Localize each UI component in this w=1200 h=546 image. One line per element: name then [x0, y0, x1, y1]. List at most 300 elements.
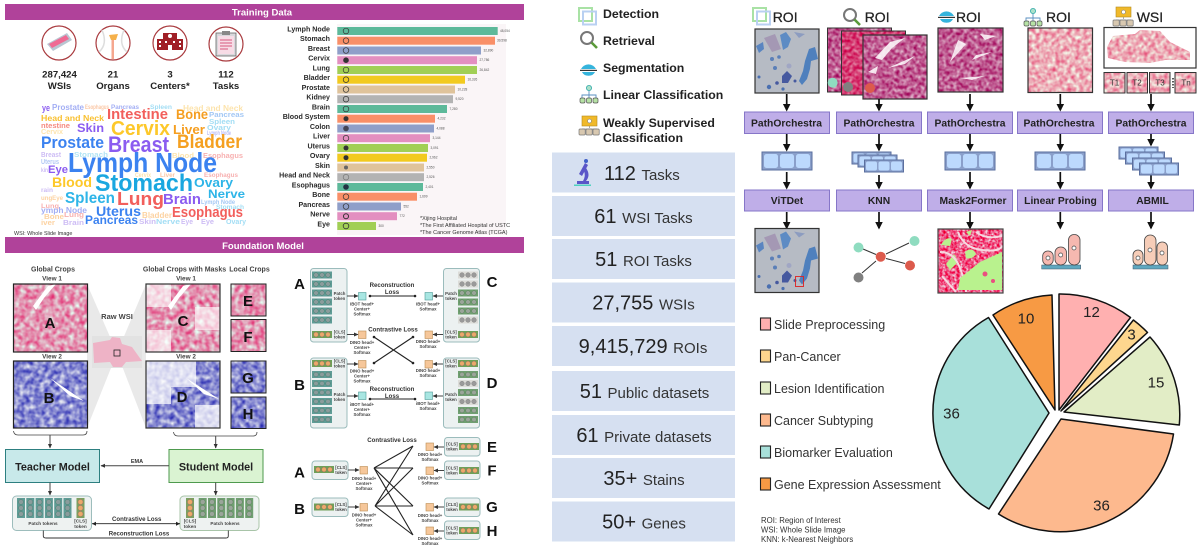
input: tiles T1 to Tn: T3	[1155, 78, 1165, 88]
stat: 51 public datasets: 51 Public datasets	[580, 381, 709, 403]
word cloud: Cervix	[41, 129, 63, 136]
head squares and heads labels: iBOT head+	[416, 401, 440, 406]
local head labels: DINO head+	[352, 512, 377, 518]
word cloud: Eye	[201, 219, 214, 226]
stat: 61 WSI tasks	[552, 196, 735, 236]
word cloud: Liver	[160, 173, 176, 179]
bar: nerve: 772	[400, 214, 405, 218]
local diagram letters: B	[294, 501, 305, 518]
bar: liver: Liver	[313, 133, 330, 141]
word cloud: Esophagus	[203, 153, 243, 160]
bar: lung	[313, 64, 489, 74]
local head labels	[352, 452, 443, 546]
student token panel: [CLS]	[184, 518, 197, 524]
bar: stomach: 39,598	[497, 39, 507, 43]
bar: blood system	[283, 113, 446, 123]
token stack C: Patch	[445, 291, 457, 296]
word cloud: Esophagus	[204, 173, 239, 179]
word cloud: Prostate	[52, 103, 85, 112]
word cloud: Bladder	[142, 211, 172, 220]
contrastive links to local crops	[348, 437, 444, 535]
bar: blood system: Blood System	[283, 113, 330, 121]
word cloud: Pancreas	[209, 112, 244, 119]
footnotes: data centers: *The First Affiliated Hospital of USTC	[420, 223, 510, 229]
input image: linear classification	[1028, 28, 1092, 92]
word cloud: Esophagus	[172, 204, 243, 221]
bar: colon: 4,088	[436, 126, 445, 130]
head squares and heads labels: Softmax	[354, 412, 371, 417]
crop labels: View 2	[176, 354, 196, 360]
abbreviations note: ROI: Region of Interest	[761, 516, 842, 525]
stat: 51 public datasets	[552, 371, 735, 411]
head squares and heads labels: Softmax	[420, 373, 437, 378]
output: nearest neighbor graph	[854, 236, 920, 282]
local CLS panels E to H: [CLS]	[446, 526, 458, 530]
word cloud: Prostate	[41, 133, 104, 152]
word cloud: Esophagus	[85, 105, 109, 111]
local crop F: F	[243, 329, 253, 346]
stat: organs: Organs	[96, 81, 130, 92]
stat: centers: Centers*	[150, 81, 190, 92]
bar: colon	[310, 123, 445, 132]
header: weakly supervised WSI	[1113, 7, 1163, 26]
local head labels: Center+	[356, 481, 373, 486]
word cloud: Spleen	[209, 119, 235, 126]
bar: kidney: 9,520	[456, 97, 464, 101]
global CLS panels A and B: token	[335, 507, 347, 512]
bar: uterus: Uterus	[308, 142, 330, 150]
bar: brain: Brain	[312, 104, 330, 112]
bar: skin: 2,550	[426, 166, 435, 170]
word cloud: Intestine	[107, 106, 168, 123]
token stack D: token	[445, 364, 457, 368]
input image: detection	[755, 29, 819, 93]
box: KNN	[836, 190, 922, 211]
token stack B: token	[334, 397, 346, 402]
bar: esophagus	[292, 182, 434, 191]
raw WSI with zoom cones	[87, 284, 146, 428]
reconstruction and contrastive links: Reconstruction	[370, 282, 415, 289]
stat: 51 ROI tasks: 51 ROI Tasks	[595, 249, 692, 271]
head squares and heads labels: DINO head+	[350, 340, 375, 345]
abbreviations note: KNN: k-Nearest Neighbors	[761, 535, 853, 544]
local CLS panels E to H: [CLS]	[446, 442, 458, 446]
bar: prostate: 10,228	[458, 88, 467, 92]
reconstruction and contrastive links: Loss	[385, 289, 400, 296]
reconstruction and contrastive links: Contrastive Loss	[368, 326, 418, 334]
word cloud: Stomach	[95, 170, 193, 197]
image crop B	[14, 361, 88, 428]
local CLS panels E to H	[444, 438, 480, 540]
box: PathOrchestra	[928, 112, 1012, 134]
header: detection ROI: ROI	[773, 9, 798, 25]
token stack D	[444, 358, 480, 428]
label: detection: Detection	[603, 7, 659, 21]
local head labels: Softmax	[422, 518, 439, 523]
input: tiles T1 to Tn: T2	[1132, 78, 1142, 88]
token stack C: token	[445, 296, 457, 301]
local head labels: Softmax	[356, 486, 373, 491]
word cloud: Skin	[139, 219, 156, 226]
box: PathOrchestra: PathOrchestra	[1116, 118, 1187, 130]
local crop F	[231, 320, 266, 352]
head squares and heads labels: Center+	[354, 345, 371, 350]
word cloud: Ovary	[207, 125, 231, 132]
student to tokens arrow	[215, 482, 217, 495]
label: weakly supervised classification: Classification	[603, 131, 683, 145]
local diagram letters: E	[487, 439, 497, 456]
token stack B	[310, 358, 347, 428]
bar: kidney: Kidney	[306, 94, 330, 102]
word cloud: Stomach	[216, 205, 244, 211]
box: ViTDet: ViTDet	[771, 196, 804, 207]
EMA arrow	[101, 459, 169, 466]
word cloud: Bone	[44, 214, 64, 221]
stack letters: A	[294, 276, 305, 293]
stat: 61 WSI tasks: 61 WSI Tasks	[594, 206, 693, 228]
head squares and heads labels: Center+	[354, 374, 371, 378]
bar: bone: Bone	[312, 191, 330, 199]
word cloud: Brain	[63, 220, 84, 227]
pie legend	[760, 318, 941, 492]
teacher model box	[6, 450, 100, 482]
token stack B: Patch	[334, 392, 346, 397]
word cloud: Brain	[163, 191, 201, 208]
bar: cervix: 27,786	[480, 58, 489, 62]
local CLS panels E to H: token	[446, 530, 458, 536]
bar: uterus: 3,091	[430, 146, 439, 150]
word cloud: Lymph Node	[207, 131, 231, 137]
slice: biomarker evaluation, 36	[933, 318, 1049, 509]
stat: 61 private datasets	[552, 415, 735, 455]
bar: nerve: Nerve	[310, 211, 330, 219]
bar: esophagus: 2,401	[426, 185, 434, 189]
word cloud: Lung	[117, 189, 164, 209]
local crop E: E	[243, 293, 253, 310]
stat: 35+ stains: 35+ Stains	[603, 468, 685, 490]
stat: 50+ genes	[552, 502, 735, 542]
bar: prostate	[302, 84, 467, 94]
bar: head and neck: 2,526	[426, 175, 435, 179]
box: PathOrchestra	[744, 112, 830, 134]
image crop A: A	[45, 315, 56, 332]
header: retrieval ROI: ROI	[865, 9, 890, 25]
slice: lesion identification, 15: 15	[1148, 374, 1164, 392]
stat: tasks: Tasks	[213, 81, 239, 92]
slice: cancer subtyping, 36: 36	[1093, 498, 1110, 514]
word cloud: Spleen	[65, 190, 115, 207]
local crop G: G	[242, 370, 254, 387]
word cloud: Head and Neck	[183, 104, 244, 113]
header: segmentation ROI	[938, 9, 981, 25]
slice: cancer subtyping, 36	[998, 419, 1174, 532]
local crop G	[231, 361, 266, 393]
teacher token panel: Patch tokens	[28, 521, 58, 526]
note: WSI abbreviation: WSI: Whole Slide Image	[14, 231, 72, 237]
word cloud: Lymph Node	[68, 147, 217, 178]
token stack A: Patch	[334, 291, 346, 296]
word cloud: Pancreas	[111, 105, 140, 111]
bar: breast: 32,890	[484, 48, 493, 52]
word cloud: Skin	[77, 121, 104, 135]
heading: training data	[5, 4, 524, 20]
stat: 50+ genes: 50+ Genes	[602, 512, 686, 534]
arrows: weakly supervised flow	[1150, 94, 1152, 228]
slice: gene expression assessment, 10: 10	[1018, 310, 1034, 328]
token stack B: token	[334, 364, 346, 368]
bar: breast	[308, 45, 493, 54]
local CLS panels E to H: [CLS]	[446, 502, 458, 507]
local crop H: H	[243, 406, 253, 423]
bar: liver: 3,144	[432, 136, 441, 140]
input: whole slide image	[1104, 28, 1196, 68]
stats column	[552, 152, 735, 542]
word cloud: ye	[42, 103, 50, 113]
label: segmentation: Segmentation	[603, 61, 684, 75]
local crop loss diagram	[294, 437, 498, 546]
token stack D: token	[445, 397, 457, 402]
word cloud: ungEye	[41, 196, 64, 202]
local diagram letters: F	[487, 462, 497, 480]
student token panel: token	[184, 524, 196, 529]
input: tiles T1 to Tn	[1104, 72, 1196, 93]
label: retrieval: Retrieval	[603, 34, 655, 48]
local head labels: Center+	[356, 518, 373, 522]
image crop A	[14, 284, 88, 352]
student token panel	[180, 496, 259, 530]
arrows: detection flow	[786, 94, 788, 228]
token stack A: [CLS]	[334, 330, 346, 334]
word cloud: Pancreas	[85, 213, 138, 227]
heading: foundation model	[5, 237, 524, 253]
local head labels: DINO head+	[352, 476, 377, 481]
local head labels: Softmax	[422, 541, 439, 546]
pie chart: task categories	[933, 294, 1180, 532]
icon: weakly supervised classification	[579, 116, 599, 135]
word cloud: Breast	[41, 152, 62, 159]
raw WSI with zoom cones: Raw WSI	[101, 312, 133, 321]
footnotes: data centers: *The Cancer Genome Atlas (TCGA)	[420, 230, 508, 236]
stack letters: D	[487, 375, 498, 392]
head squares and heads labels: Softmax	[420, 306, 437, 312]
stat: WSIs: 287,424	[42, 70, 77, 80]
teacher token panel	[12, 496, 92, 530]
teacher token panel: token	[74, 524, 87, 529]
bar: nerve	[310, 211, 405, 220]
slice: slide preprocessing, 12: 12	[1083, 304, 1100, 321]
bar: pancreas	[298, 201, 409, 210]
local crop E	[231, 284, 266, 316]
stack letters	[294, 274, 498, 394]
bar: skin: Skin	[315, 162, 330, 170]
legend: gene expression assessment: Gene Expression Assessment	[774, 478, 941, 492]
word cloud: Head and Neck	[41, 113, 104, 123]
word cloud: Lymph Node	[201, 200, 236, 206]
EMA arrow: EMA	[131, 459, 143, 465]
bar: eye: Eye	[317, 220, 330, 228]
head squares and heads labels: Softmax	[420, 344, 437, 349]
box: PathOrchestra: PathOrchestra	[844, 118, 915, 130]
bar: stomach: Stomach	[300, 35, 330, 43]
arrows: linear flow	[1059, 94, 1061, 228]
box: PathOrchestra	[836, 112, 922, 134]
bracket and arrow to teacher	[14, 431, 87, 448]
label: linear classification: Linear Classification	[603, 88, 723, 102]
local head labels: DINO head+	[418, 452, 443, 457]
local head labels: Softmax	[356, 522, 373, 528]
local head labels: Softmax	[422, 480, 439, 486]
local head labels: DINO head+	[418, 476, 443, 480]
stat: WSIs	[42, 26, 77, 92]
output icon: classifier bars	[1042, 234, 1081, 269]
reconstruction and contrastive links: Reconstruction	[370, 386, 415, 393]
bar: breast: Breast	[308, 45, 331, 53]
header: retrieval ROI	[844, 9, 890, 25]
icon: linear classification	[580, 85, 598, 103]
bar: lung: 26,842	[480, 68, 489, 72]
bar: ovary: 2,962	[430, 156, 438, 160]
box: PathOrchestra: PathOrchestra	[1024, 118, 1095, 130]
stat: 9,415,729 ROIs: 9,415,729 ROIs	[579, 336, 707, 358]
word cloud: Spleen	[150, 105, 172, 111]
input: tiles T1 to Tn: T1	[1110, 78, 1120, 88]
token stack D: Patch	[445, 392, 457, 397]
token stack C: [CLS]	[445, 330, 457, 334]
stat: organs	[96, 26, 130, 92]
box: ABMIL	[1108, 190, 1194, 211]
feature block	[945, 152, 995, 170]
bar chart: slides per organ	[279, 26, 510, 230]
bar: stomach	[300, 35, 507, 45]
box: PathOrchestra: PathOrchestra	[935, 118, 1006, 130]
bar: head and neck	[279, 172, 435, 181]
teacher to tokens arrow	[49, 482, 51, 495]
box: PathOrchestra: PathOrchestra	[751, 118, 822, 130]
label: weakly supervised classification: Weakly Supervised	[603, 116, 715, 130]
reconstruction and contrastive links	[347, 282, 443, 400]
word cloud: Nerve	[156, 219, 180, 226]
token stack C	[444, 268, 480, 342]
bar: pancreas: Pancreas	[298, 201, 330, 209]
bar: liver	[313, 133, 441, 142]
stat: WSIs: WSIs	[48, 81, 71, 92]
panel: foundation model	[5, 237, 524, 546]
word cloud: Liver	[173, 122, 205, 137]
bar: colon: Colon	[310, 123, 330, 131]
output icon: attention bars	[1133, 235, 1168, 269]
bar: cervix: Cervix	[308, 55, 330, 63]
bar: cervix	[308, 55, 489, 64]
head squares and heads labels: Center+	[354, 306, 371, 312]
word cloud	[41, 103, 246, 227]
stack letters: C	[487, 274, 498, 291]
stat: organs: 21	[108, 70, 119, 80]
word cloud: ntestine	[41, 123, 70, 130]
word cloud: Uterus	[96, 203, 141, 219]
bar: lymph node	[287, 26, 510, 35]
token stack A	[310, 268, 347, 342]
stat: tasks	[209, 27, 243, 92]
header: linear classification ROI: ROI	[1046, 9, 1071, 25]
image crop C with masks: C	[178, 313, 189, 330]
box: ABMIL: ABMIL	[1136, 196, 1169, 207]
local head squares	[360, 443, 434, 534]
crop labels: Global Crops with Masks	[143, 266, 226, 274]
bar: bladder: Bladder	[304, 74, 330, 82]
stat: tasks: 112	[218, 70, 234, 80]
token stack D: [CLS]	[445, 358, 457, 364]
bar: uterus	[308, 142, 439, 152]
image crop C with masks	[146, 284, 220, 352]
stat: 51 ROI tasks	[552, 239, 735, 279]
header: weakly supervised WSI: WSI	[1137, 9, 1163, 25]
head squares and heads labels: DINO head+	[350, 368, 375, 374]
arrows: retrieval flow	[878, 99, 880, 228]
legend: biomarker evaluation: Biomarker Evaluation	[774, 446, 893, 460]
local crop H	[231, 397, 266, 428]
word cloud: Eye	[48, 164, 68, 176]
bar: brain: 7,280	[450, 107, 458, 111]
panel: training data	[5, 4, 524, 237]
icon: segmentation	[580, 64, 597, 76]
student model box	[169, 450, 263, 482]
feature stack	[1119, 147, 1178, 175]
bar: ovary	[310, 152, 438, 162]
word cloud: Lung	[64, 212, 84, 219]
word cloud: Lung	[41, 204, 59, 210]
teacher model box: Teacher Model	[15, 462, 90, 474]
heading: training data: Training Data	[232, 8, 293, 18]
word cloud: Nerve	[208, 187, 245, 201]
head squares and heads labels	[350, 292, 441, 417]
image crop D with masks: D	[177, 389, 188, 406]
input: tiles T1 to Tn: Tn	[1181, 78, 1191, 88]
bar: ovary: Ovary	[310, 152, 330, 160]
token stack A: token	[334, 334, 346, 340]
slice: slide preprocessing, 12	[1059, 294, 1130, 410]
stat: 27,755 WSIs	[552, 282, 735, 322]
crop labels: View 2	[42, 354, 62, 360]
head squares and heads labels: DINO head+	[416, 368, 441, 373]
header: detection ROI	[753, 8, 798, 25]
bar: bladder: 16,326	[468, 78, 477, 82]
panel: segmentation pipeline	[928, 9, 1012, 293]
stat: 9,415,729 ROIs	[552, 326, 735, 366]
contrastive loss link: Contrastive Loss	[112, 516, 162, 523]
word cloud: Ovary	[226, 219, 246, 226]
word cloud: Eye	[181, 219, 193, 226]
local diagram letters: H	[487, 523, 497, 540]
panel: detection pipeline	[744, 8, 830, 292]
reconstruction and contrastive links: Loss	[385, 393, 400, 400]
feature block	[1035, 152, 1085, 170]
word cloud: kin	[41, 168, 48, 174]
global CLS panels A and B: [CLS]	[335, 502, 347, 507]
bar: eye: 300	[378, 224, 384, 228]
legend: slide preprocessing: Slide Preprocessing	[774, 318, 885, 332]
feature block	[762, 152, 812, 170]
input images: retrieval stack	[828, 28, 927, 99]
word cloud: Cervix	[135, 173, 152, 179]
student model box: Student Model	[179, 462, 253, 474]
local CLS panels E to H: token	[446, 470, 458, 476]
local diagram letters: A	[294, 464, 305, 482]
word cloud: Ovary	[194, 175, 234, 190]
word cloud: rain	[41, 188, 53, 194]
word cloud: Stomach	[74, 152, 108, 159]
head squares and heads labels: Softmax	[354, 350, 371, 355]
head squares and heads labels: iBOT head+	[350, 402, 374, 407]
